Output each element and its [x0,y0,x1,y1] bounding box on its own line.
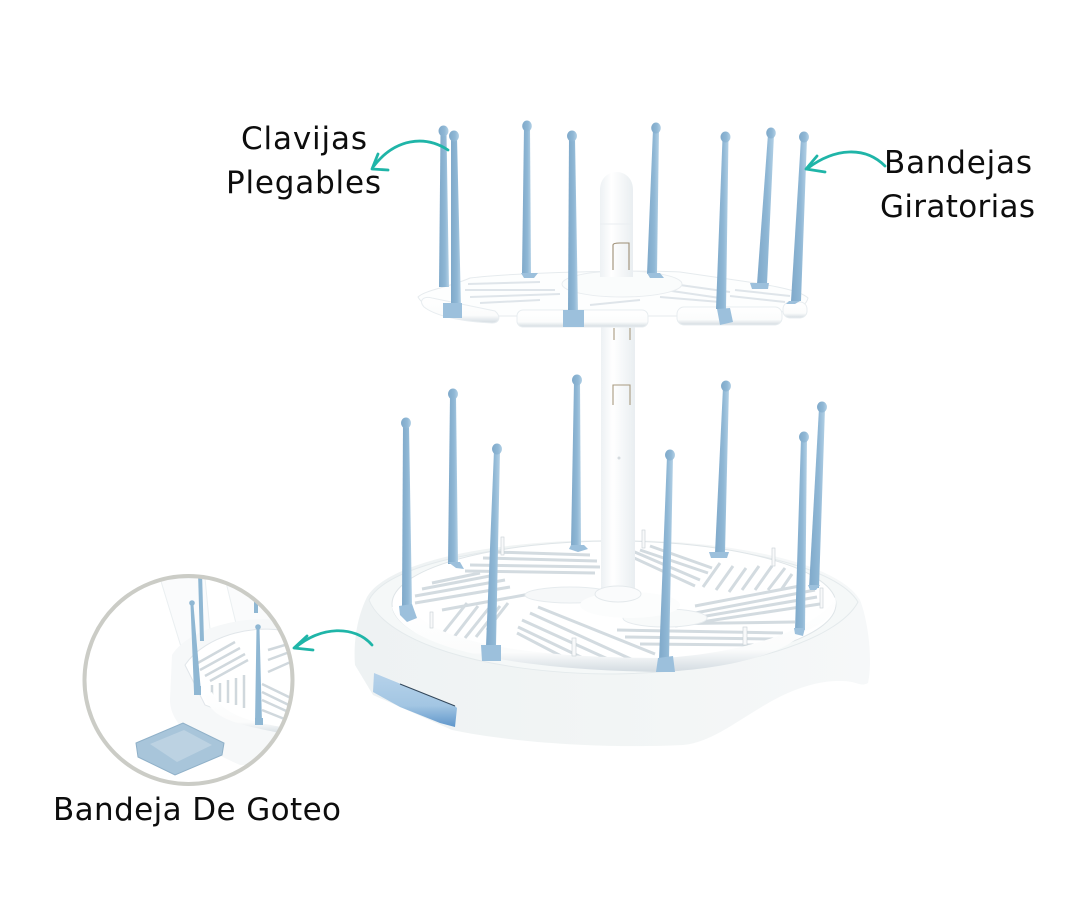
lower rotating tray [392,541,836,672]
label: Bandejas Giratorias: Giratorias [880,189,1035,225]
label: Bandeja De Goteo: Bandeja De Goteo [53,792,341,828]
lower pegs [401,374,827,660]
label: Clavijas Plegables: Clavijas [241,121,367,157]
label: Bandejas Giratorias [880,145,1035,225]
inset tray base [170,619,300,765]
centre pole [595,320,641,602]
upper rotating tray [418,271,808,327]
small white studs [430,530,823,656]
arrow: to folding pegs [372,141,448,170]
inset drawer [136,723,224,775]
inset pegs [189,572,263,725]
inset bottles [160,578,236,645]
inset: drip tray detail [84,572,300,784]
label: Bandejas Giratorias: Bandejas [884,145,1032,181]
drawer handle [373,673,457,727]
drip base [355,540,870,746]
arrow: to drip tray [294,631,372,650]
product: bottle drying rack [355,120,870,746]
label: Clavijas Plegables: Plegables [226,165,381,201]
upper pole cap [600,172,633,277]
infographic canvas [56,120,1034,826]
upper pegs [438,120,809,312]
upper peg connectors [443,273,800,327]
arrow: to rotating trays [806,152,885,172]
lower peg feet [399,545,820,672]
label: Clavijas Plegables [226,121,381,201]
